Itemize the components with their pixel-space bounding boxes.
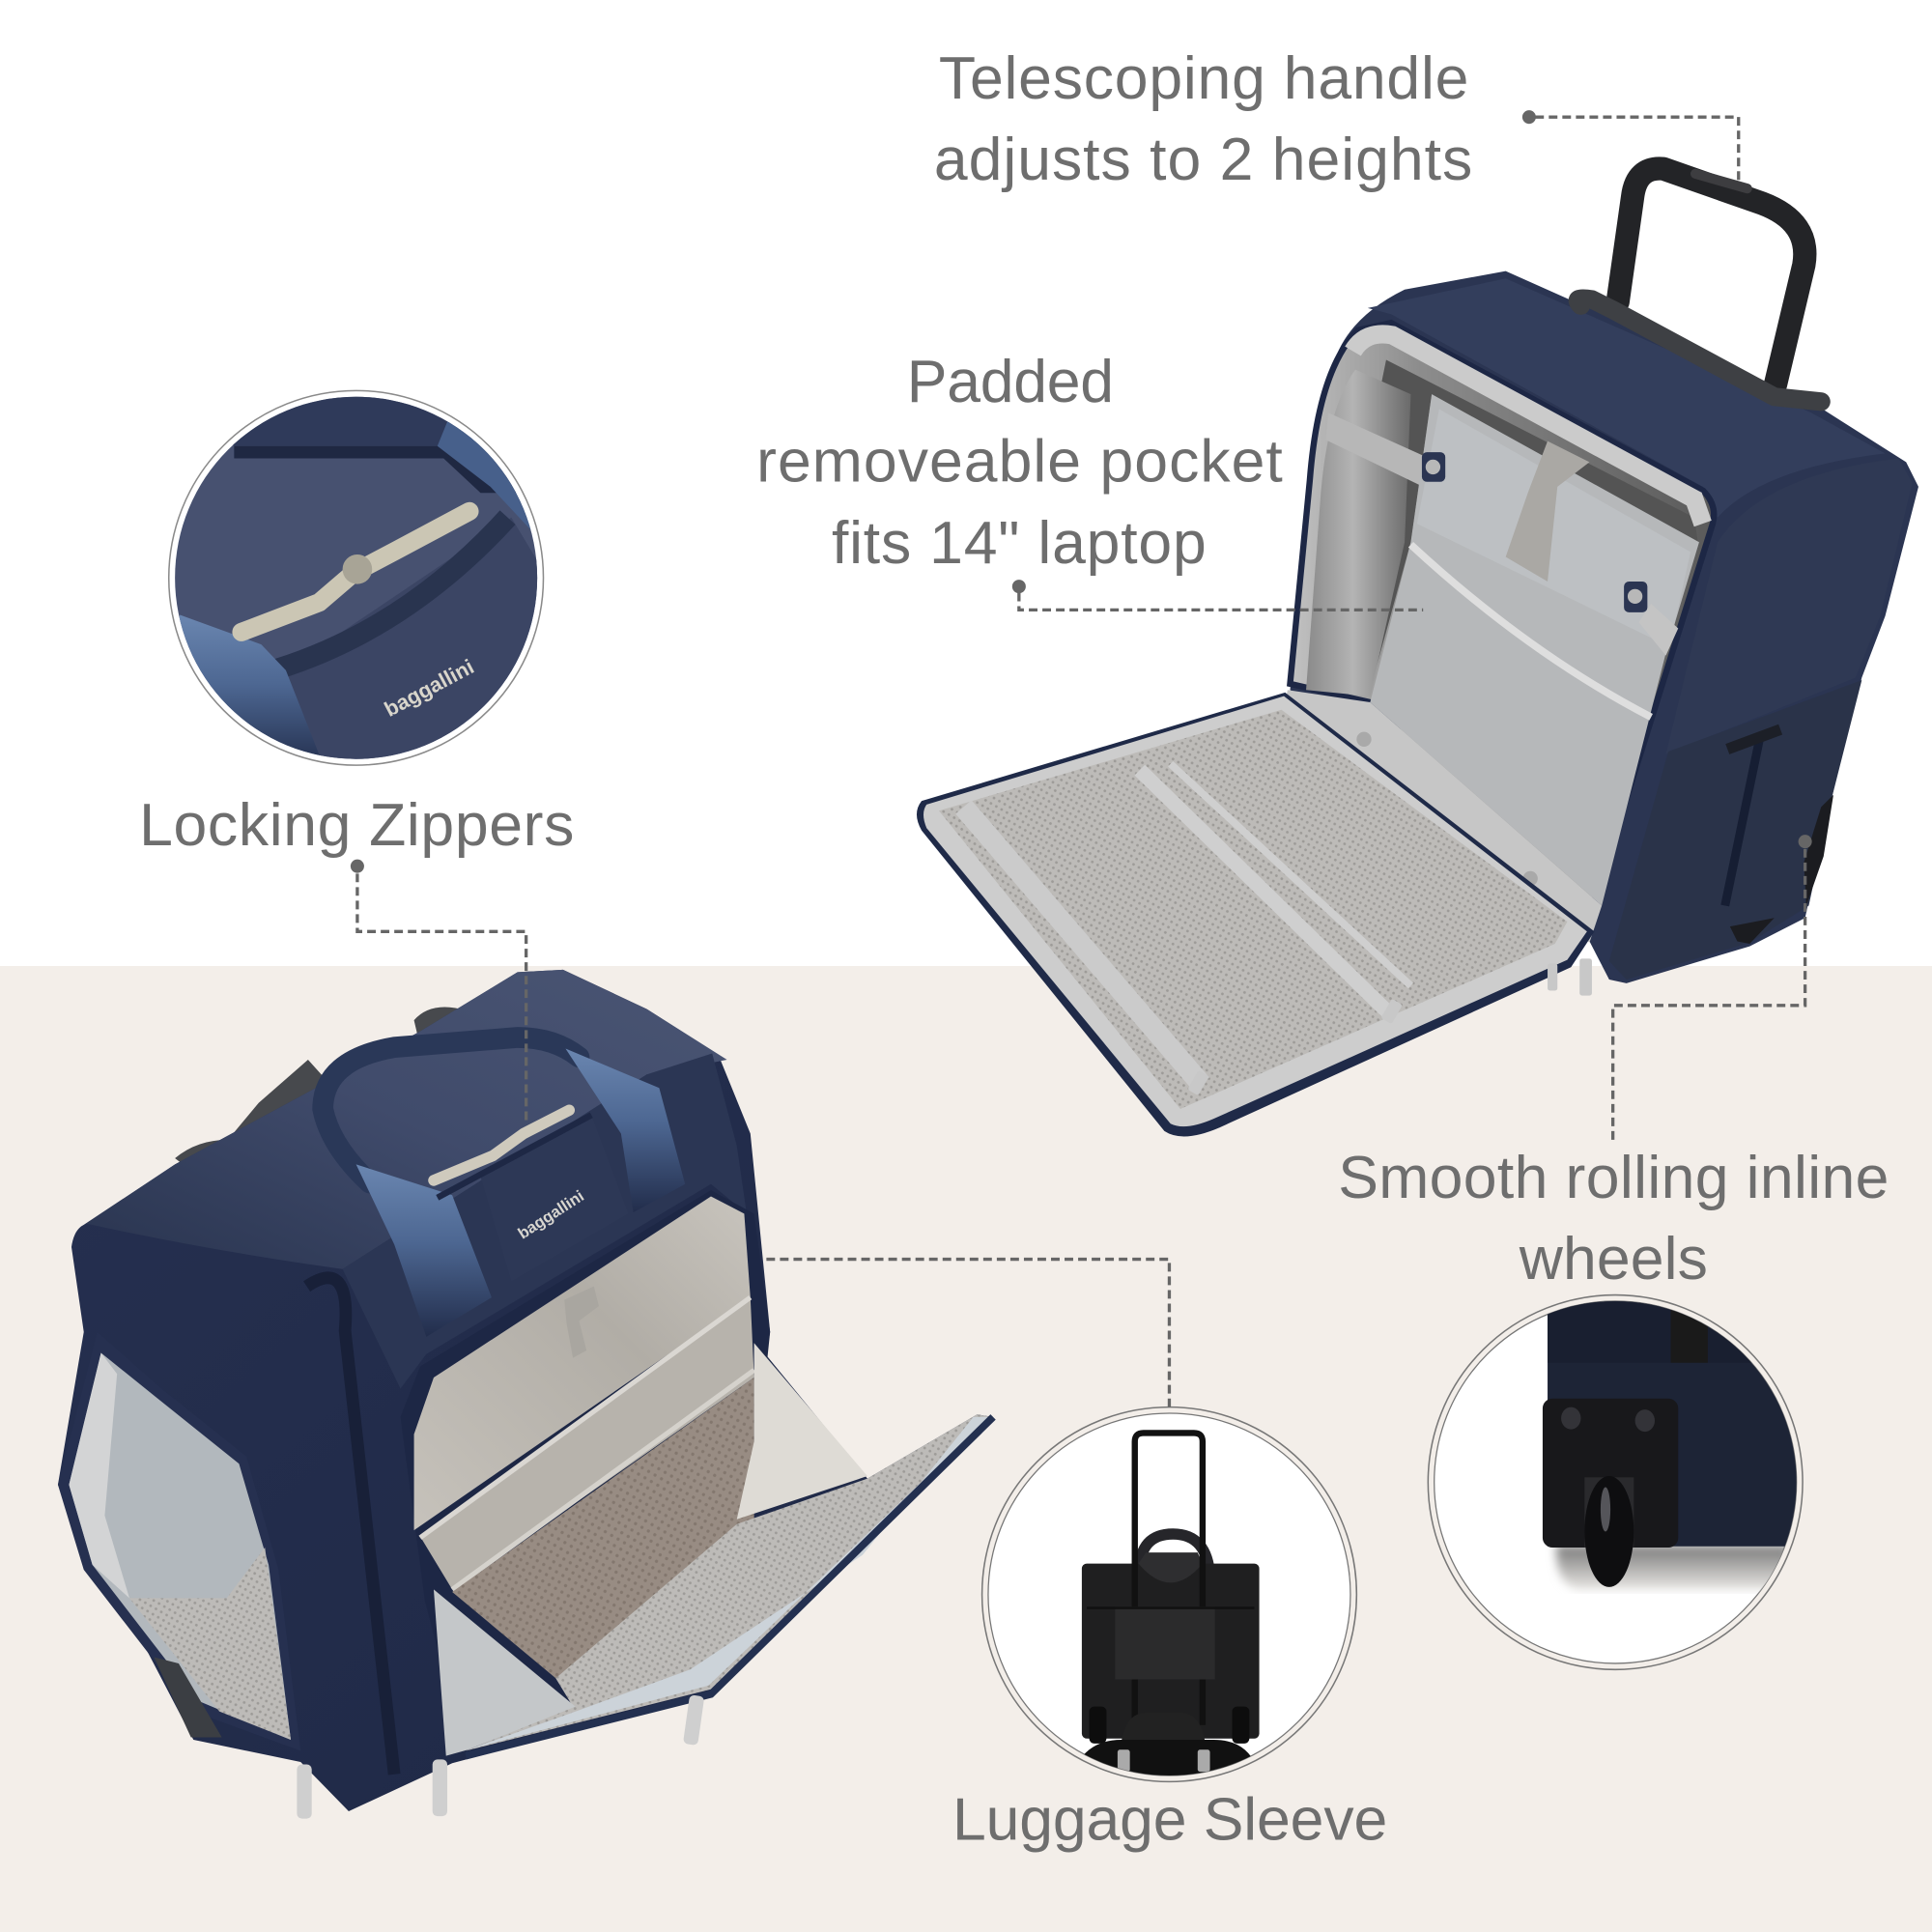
shadowed cavity [1350, 359, 1698, 690]
seam zipper [307, 1278, 394, 1775]
callout line: telescoping handle [1522, 110, 1739, 185]
flap light trim [469, 1417, 989, 1749]
pocket fold tab [1506, 441, 1589, 582]
rear handle pieces [175, 1008, 468, 1171]
main compartment interior backing [401, 1190, 770, 1756]
mesh flap lining [923, 696, 1587, 1126]
interior lining [1290, 323, 1714, 924]
zipper photo [169, 389, 549, 770]
padded laptop pocket [1370, 394, 1699, 906]
wheel housing [1730, 795, 1833, 944]
label: padded pocket: removeable pocket [756, 428, 1283, 496]
callout line: luggage sleeve [766, 1260, 1169, 1407]
label: padded pocket: Padded [907, 348, 1114, 415]
interior strap [1325, 412, 1430, 487]
label: locking zippers: Locking Zippers [139, 791, 574, 859]
label: luggage sleeve: Luggage Sleeve [952, 1785, 1387, 1853]
right strap [565, 1048, 685, 1212]
lower pocket edge [452, 1370, 754, 1589]
side pocket details [1725, 729, 1780, 906]
pocket seam [1410, 545, 1651, 717]
detail circle: inline wheels [1428, 1293, 1806, 1669]
label: telescoping handle: Telescoping handle [939, 44, 1468, 112]
ring [169, 390, 543, 765]
upper interior lining [414, 1197, 751, 1530]
triangular pocket lining [434, 1589, 576, 1756]
telescoping handle [1618, 169, 1804, 384]
handle arc [323, 1037, 579, 1182]
floor snaps [1356, 732, 1538, 886]
mesh flap edge [917, 693, 1595, 1136]
callout line: wheels [1613, 835, 1812, 1144]
ring [1428, 1295, 1803, 1669]
sleeve photo [1082, 1430, 1260, 1776]
silver zipper pulls [297, 1694, 704, 1819]
suitcase shell [1290, 271, 1918, 983]
label: inline wheels: Smooth rolling inline [1338, 1144, 1889, 1211]
snap rivets [1422, 452, 1678, 656]
top zipper pull [434, 1110, 569, 1180]
logo: baggallini [515, 1186, 587, 1243]
closed-front suitcase, lower left [58, 970, 993, 1819]
front upper panel [343, 1054, 747, 1389]
top lighter face [1368, 278, 1886, 518]
interior strap tab [564, 1287, 599, 1358]
side panel [1665, 458, 1913, 754]
taupe mesh back [452, 1378, 754, 1678]
side compartment rim [58, 1332, 300, 1750]
upper lip [1353, 334, 1703, 524]
zipper track [438, 1115, 591, 1198]
inner right lining [737, 1343, 867, 1520]
left strap [356, 1164, 492, 1337]
ring [982, 1407, 1356, 1781]
label: padded pocket: fits 14" laptop [832, 509, 1207, 577]
top face [86, 970, 727, 1269]
label: inline wheels: wheels [1519, 1225, 1708, 1293]
pocket band [420, 1297, 754, 1589]
callout line: padded pocket [1012, 580, 1423, 610]
top grip plate [1577, 298, 1821, 402]
flap navy edge [466, 1417, 993, 1756]
mesh panel [939, 710, 1567, 1109]
label: telescoping handle [934, 44, 1472, 193]
white inner disc [988, 1413, 1350, 1776]
side mesh pocket [129, 1548, 291, 1740]
front fabric near handle [480, 1115, 629, 1282]
body silhouette [58, 970, 993, 1811]
zipper strips [963, 764, 1410, 1084]
zipper pulls [1187, 958, 1592, 1095]
white inner disc [1435, 1301, 1797, 1663]
open suitcase, upper right [917, 169, 1918, 1136]
wheel photo [1543, 1293, 1806, 1589]
interior floor [1282, 690, 1602, 943]
left interior wall [1306, 370, 1410, 696]
side white-lit strip [69, 1353, 129, 1598]
label: padded pocket [756, 348, 1283, 577]
pocket upper satin [1417, 409, 1690, 647]
pocket top edge [420, 1297, 751, 1538]
label: inline wheels [1338, 1144, 1889, 1293]
detail circle: locking zippers [169, 389, 549, 770]
callout line: locking zippers [351, 860, 526, 1122]
zipper photo: baggallini [381, 654, 478, 722]
wheel [154, 1658, 222, 1737]
flap mesh [466, 1414, 992, 1750]
side pocket [1609, 680, 1861, 980]
detail circle: luggage sleeve [982, 1407, 1356, 1799]
label: telescoping handle: adjusts to 2 heights [934, 126, 1472, 193]
side compartment lining [69, 1353, 291, 1740]
